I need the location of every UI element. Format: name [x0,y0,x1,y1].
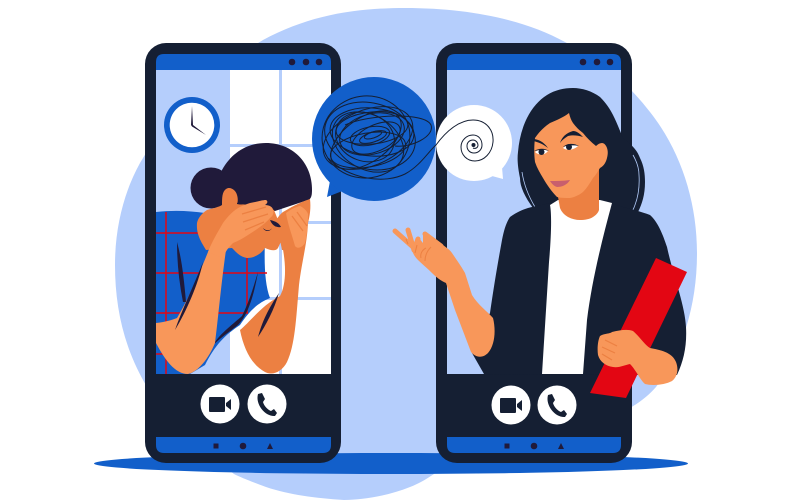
white shirt [542,200,612,374]
right hand [277,199,310,250]
top status bar [156,54,331,70]
scribble and spiral line [314,90,493,184]
shirt plaid lines [156,212,267,374]
hair [221,143,312,211]
video button [200,384,240,424]
finger creases [242,207,268,230]
blue speech bubble [312,77,436,201]
shirt folds [177,242,258,347]
screen wall [447,70,621,374]
bottom nav bar [447,437,621,453]
eyes [534,144,579,155]
status dots [580,59,613,65]
face and neck [197,188,284,258]
hair highlight strands [522,155,639,212]
illustration: online counselling video call [94,8,697,500]
top status bar [447,54,621,70]
lips [550,180,570,187]
status dots [289,59,322,65]
raised arm and hand [395,230,495,357]
right hand fingers [286,206,308,248]
therapist [395,88,687,398]
shirt [156,211,270,374]
red folder [590,258,687,398]
background blob [115,8,697,500]
left phone [145,43,341,463]
jacket [472,203,686,375]
bottom nav bar [156,437,331,453]
video button [492,386,530,424]
arm fold lines [175,262,279,337]
spiral centre [472,143,476,147]
crying person [156,143,312,374]
screen wall [156,70,331,374]
white speech bubble [436,105,512,181]
nav icons [504,443,564,449]
clock [164,97,220,153]
phone body [145,43,341,463]
bun [190,168,224,208]
window [230,70,331,374]
phone call button [248,384,286,424]
phone body [436,43,632,463]
holding hand and forearm [598,330,677,385]
neck [558,166,599,220]
eyebrows [533,131,583,148]
hair back [518,88,645,212]
right forearm [240,223,308,374]
ground shadow ellipse [94,453,688,474]
nav icons [214,443,273,449]
phone call button [538,386,576,424]
eye and eyebrow [237,203,281,231]
right hand creases [292,212,307,231]
left hand [208,200,273,258]
left forearm [156,247,226,374]
face [534,113,608,198]
right phone [436,43,632,463]
